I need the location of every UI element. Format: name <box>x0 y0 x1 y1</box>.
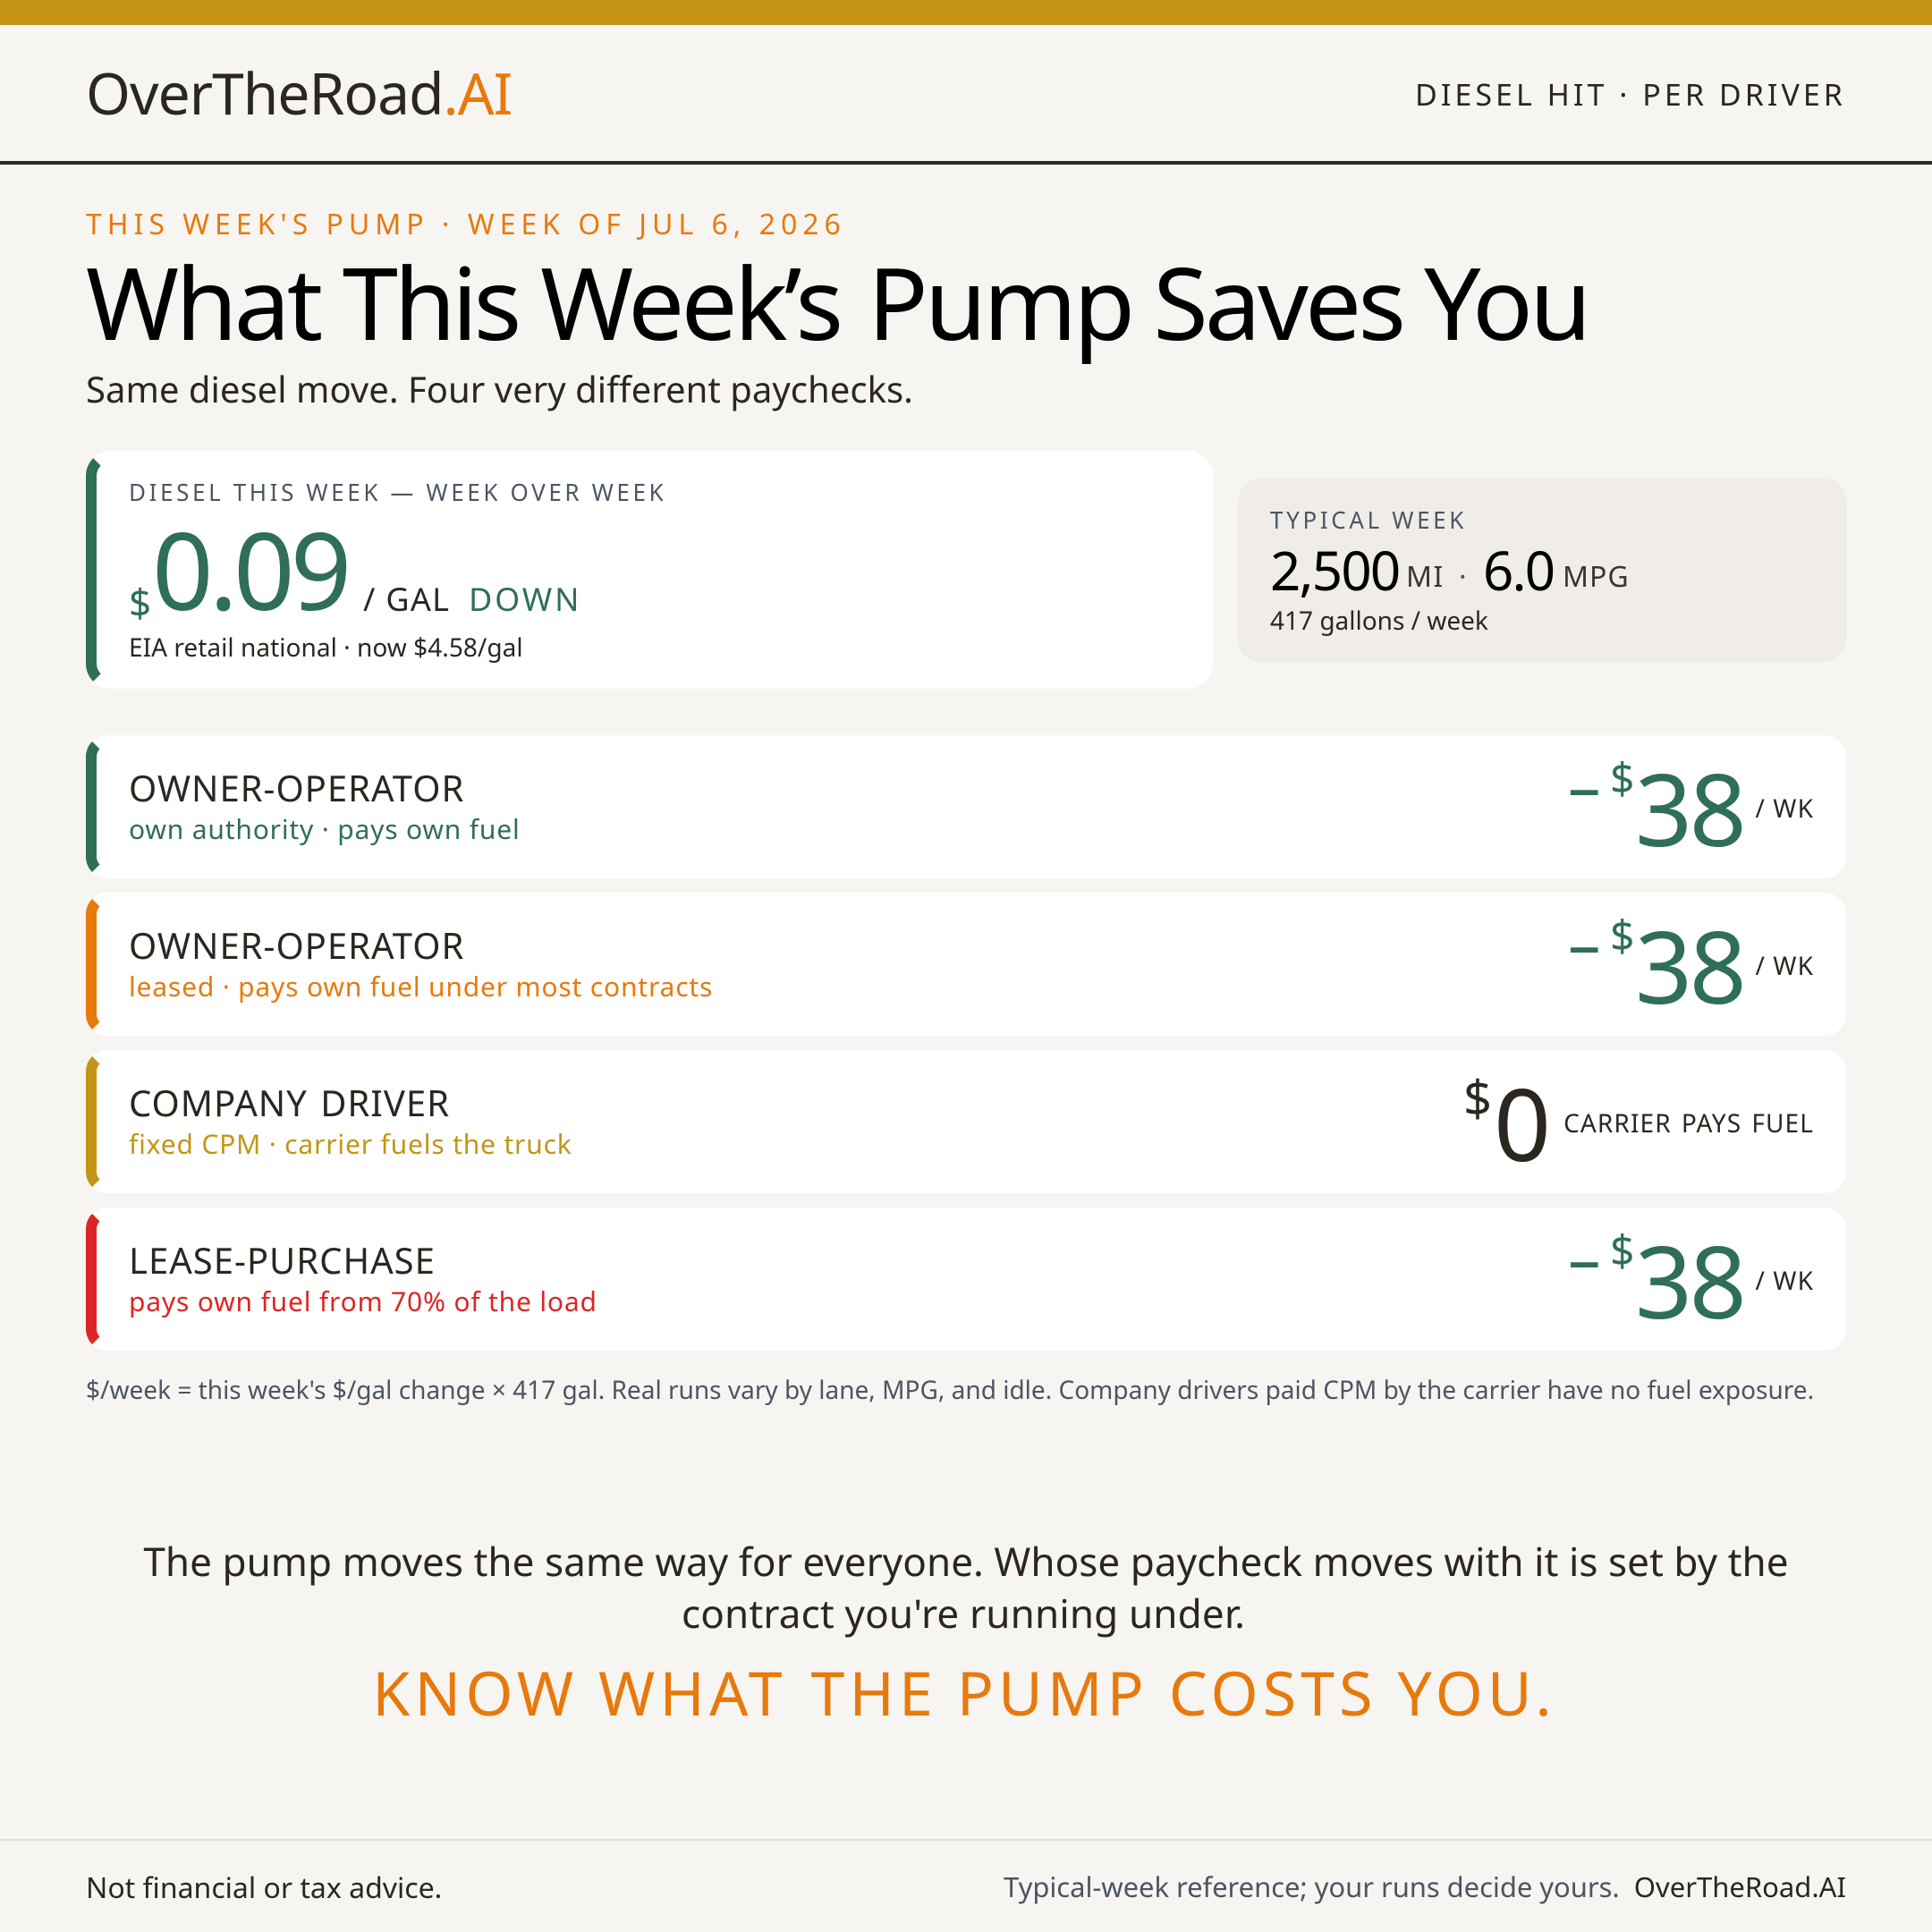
subtitle: Same diesel move. Four very different paychecks. <box>86 364 913 413</box>
call to action: KNOW WHAT THE PUMP COSTS YOU. <box>372 1650 1556 1733</box>
dollar sign: $ <box>129 575 151 629</box>
footnote: $/week = this week's $/gal change × 417 gal. Real runs vary by lane, MPG, and idle. Company drivers paid CPM by the carrier have no fuel exposure. <box>86 1373 1814 1407</box>
role: LEASE-PURCHASE <box>129 1235 436 1284</box>
role detail: leased · pays own fuel under most contracts <box>129 968 713 1004</box>
miles: 2,500 <box>1270 533 1399 606</box>
miles unit: MI <box>1406 556 1444 596</box>
eyebrow: THIS WEEK'S PUMP · WEEK OF JUL 6, 2026 <box>86 205 846 243</box>
minus sign: – <box>1568 1214 1601 1302</box>
closing statement: The pump moves the same way for everyone. Whose paycheck moves with it is set by the <box>143 1534 1789 1588</box>
dollar sign: $ <box>1610 907 1634 965</box>
minus sign: – <box>1568 899 1601 987</box>
row: company driver <box>86 1050 1846 1193</box>
header label: DIESEL HIT · PER DRIVER <box>1415 73 1846 114</box>
unit: / WK <box>1756 792 1814 826</box>
row: owner-operator leased <box>86 893 1846 1036</box>
role detail: fixed CPM · carrier fuels the truck <box>129 1125 572 1162</box>
disclaimer: Not financial or tax advice. <box>86 1868 442 1907</box>
dollar sign: $ <box>1610 1222 1634 1280</box>
panel: typical week <box>1238 479 1846 662</box>
amount: 38 <box>1635 1211 1743 1348</box>
row: lease-purchase <box>86 1208 1846 1351</box>
dollar sign: $ <box>1610 750 1634 808</box>
direction: DOWN <box>469 576 581 621</box>
per gallon unit: / GAL <box>363 576 450 621</box>
role detail: pays own fuel from 70% of the load <box>129 1283 597 1319</box>
amount: 0 <box>1494 1054 1551 1191</box>
minus sign: – <box>1568 741 1601 830</box>
role detail: own authority · pays own fuel <box>129 810 521 847</box>
row: owner-operator own authority <box>86 735 1846 878</box>
mpg unit: MPG <box>1563 556 1630 596</box>
brand logo: OverTheRoad.AI <box>86 54 512 131</box>
footer <box>0 1839 1932 1932</box>
price change number: 0.09 <box>152 496 347 642</box>
header <box>0 25 1932 165</box>
unit: / WK <box>1756 949 1814 983</box>
note: CARRIER PAYS FUEL <box>1563 1106 1814 1140</box>
closing statement <box>143 1534 1789 1640</box>
top accent bar <box>0 0 1932 25</box>
main title: What This Week’s Pump Saves You <box>86 233 1589 369</box>
unit: / WK <box>1756 1264 1814 1298</box>
gallons: 417 gallons / week <box>1270 604 1488 638</box>
diesel label: DIESEL THIS WEEK — WEEK OVER WEEK <box>129 476 666 508</box>
footer right text: Typical-week reference; your runs decide yours. OverTheRoad.AI <box>1004 1868 1846 1906</box>
role: OWNER-OPERATOR <box>129 920 464 970</box>
mpg: 6.0 <box>1483 533 1554 606</box>
role: COMPANY DRIVER <box>129 1078 450 1127</box>
amount: 38 <box>1635 739 1743 876</box>
typical week label: TYPICAL WEEK <box>1270 504 1467 536</box>
amount: 38 <box>1635 896 1743 1033</box>
source note: EIA retail national · now $4.58/gal <box>129 631 523 665</box>
closing statement: contract you're running under. <box>682 1586 1245 1640</box>
separator: · <box>1459 556 1467 596</box>
dollar sign: $ <box>1463 1063 1492 1131</box>
panel: diesel this week <box>86 451 1213 689</box>
role: OWNER-OPERATOR <box>129 763 464 812</box>
